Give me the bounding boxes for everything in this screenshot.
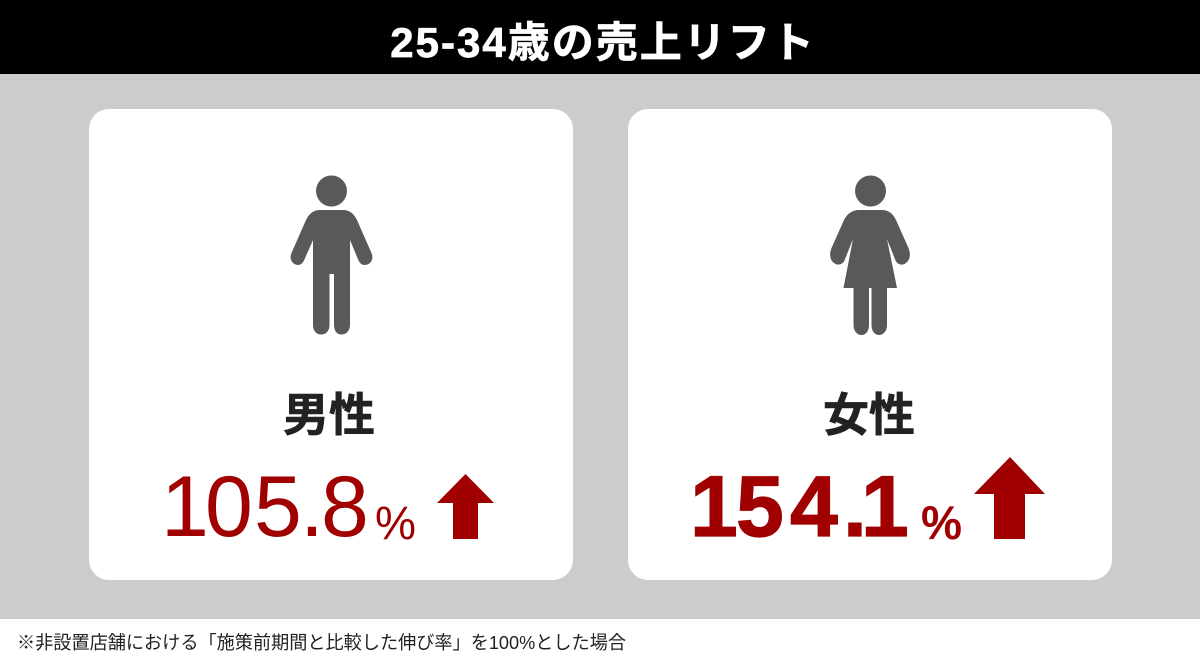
footnote: ※非設置店舗における「施策前期間と比較した伸び率」を100%とした場合 bbox=[17, 632, 626, 653]
icon: female figure bbox=[830, 176, 910, 335]
percent sign: male: % bbox=[375, 496, 416, 549]
title bar: 25-34歳の売上リフト bbox=[390, 19, 816, 66]
icon: male figure bbox=[291, 176, 372, 334]
heading: female: 女性 bbox=[823, 389, 915, 441]
arrow: male up bbox=[437, 474, 494, 539]
heading: male: 男性 bbox=[283, 389, 375, 441]
title bar bbox=[0, 0, 1200, 74]
percent sign: female: % bbox=[921, 496, 962, 549]
panel: male bbox=[89, 109, 573, 580]
arrow: female up bbox=[974, 457, 1045, 539]
panel: female bbox=[628, 109, 1112, 580]
value: female lift: 154.1 bbox=[690, 459, 909, 555]
value: male lift: 105.8 bbox=[161, 459, 369, 555]
